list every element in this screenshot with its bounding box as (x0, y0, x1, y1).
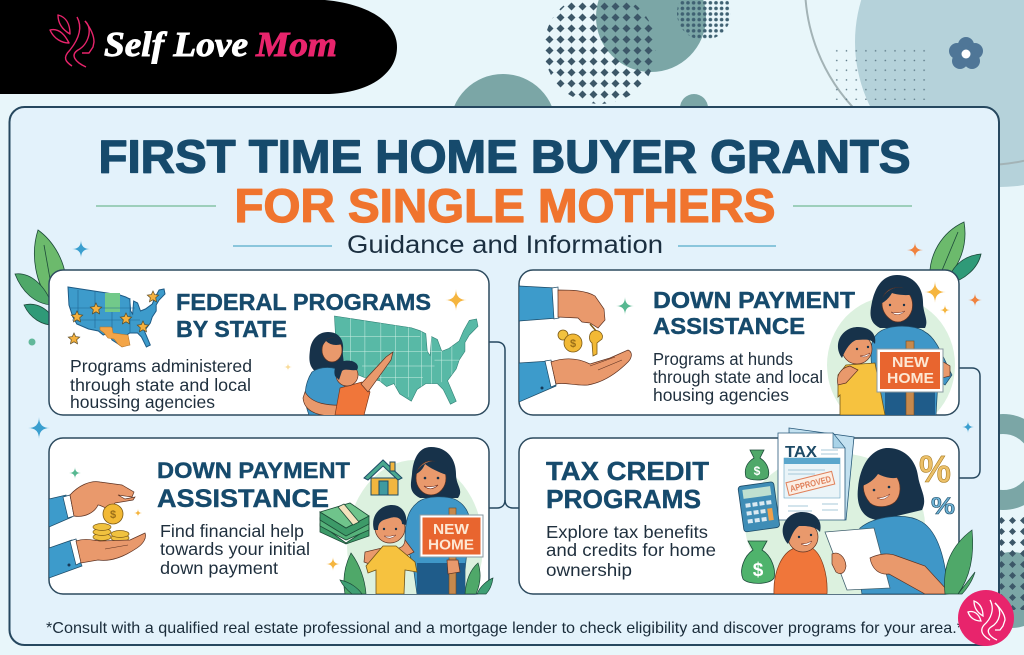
illustration: family with new home sign (344, 447, 480, 594)
card body text (653, 349, 823, 405)
background blob (827, 300, 955, 412)
logo wordmark accent: Mom (255, 25, 337, 64)
icon: calculator (738, 482, 780, 532)
card body text: houssing agencies (70, 392, 215, 412)
card heading line 2: PROGRAMS (546, 484, 701, 514)
background blob (347, 460, 482, 594)
sparkles (924, 281, 950, 315)
icon: money bag small (745, 450, 769, 480)
icon: tax document: APPROVED (789, 474, 832, 494)
card body text: through state and local (653, 367, 823, 387)
sparkle (616, 297, 634, 315)
leaves: right (930, 222, 981, 285)
card body text: Find financial help (160, 521, 304, 541)
card heading: DOWN PAYMENT (157, 458, 350, 483)
illustration: percent symbols: % (919, 449, 951, 491)
illustration: mother and child with document (774, 448, 948, 594)
leaves: left (15, 230, 66, 325)
footnote: *Consult with a qualified real estate professional and a mortgage lender to check eligibility and discover programs for your area.* (46, 620, 963, 637)
logo banner (0, 0, 397, 94)
panel: federal programs by state (49, 270, 489, 416)
logo wordmark: Self Love (104, 25, 248, 64)
card heading: DOWN PAYMENT (653, 287, 855, 313)
sign: new home: HOME (887, 370, 934, 387)
title line 1: FIRST TIME HOME BUYER GRANTS (98, 130, 910, 182)
card body text (70, 356, 252, 412)
icon: cash stack (320, 503, 369, 544)
card heading: TAX CREDIT (546, 456, 709, 486)
icon: hands with coins (49, 482, 146, 578)
illustration: percent symbols (919, 449, 955, 520)
badge: logo circle (958, 590, 1014, 646)
panel: tax credit programs (519, 428, 975, 597)
logo icon: butterfly woman profile (50, 15, 94, 67)
sign: new home: NEW (892, 354, 930, 371)
icon: money bag large: $ (753, 560, 764, 581)
card body text: through state and local (70, 375, 251, 395)
icon: tax document: TAX (785, 444, 817, 461)
sign: new home: HOME (428, 538, 474, 554)
sparkles and dots (28, 240, 982, 439)
sign: new home (420, 515, 483, 557)
card heading line 2: ASSISTANCE (157, 485, 329, 513)
plant overlapping card edge (944, 530, 975, 594)
card heading line 2: ASSISTANCE (653, 313, 805, 339)
panel: down payment assistance (left) (48, 437, 494, 595)
sign: new home (877, 349, 943, 392)
card heading: FEDERAL PROGRAMS (176, 289, 431, 315)
plants overlapping card edge (340, 578, 493, 594)
panel: down payment assistance (right) (519, 270, 959, 433)
card body text: and credits for home (546, 540, 716, 560)
background blob (745, 453, 925, 597)
card body text: towards your initial (160, 539, 310, 559)
main panel (10, 107, 999, 645)
icon: US map with stars (68, 287, 165, 347)
icon: tax document (778, 428, 854, 520)
connectors (489, 342, 980, 508)
illustration: mother and child pointing (303, 332, 393, 416)
illustration: large US map (333, 316, 478, 404)
card body text (160, 521, 310, 578)
icon: hands with coins: $ (110, 509, 116, 521)
card body text: Programs administered (70, 356, 252, 376)
card body text: Programs at hunds (653, 349, 793, 369)
icon: money bag small: $ (754, 464, 761, 478)
icon: house (364, 460, 402, 495)
card body text (546, 522, 716, 580)
illustration: percent symbols: % (931, 493, 955, 520)
sparkle (445, 289, 467, 311)
sparkle (69, 467, 81, 479)
illustration: family with new home sign (838, 275, 952, 415)
icon: money bag large (742, 541, 774, 583)
icon: hands with key and coin (519, 286, 631, 402)
icon: hands with key and coin: $ (570, 338, 576, 350)
card body text: ownership (546, 560, 632, 580)
title line 2: FOR SINGLE MOTHERS (234, 180, 776, 233)
card heading line 2: BY STATE (176, 316, 287, 342)
card body text: down payment (160, 558, 278, 578)
subtitle: Guidance and Information (347, 231, 663, 259)
card body text: Explore tax benefits (546, 522, 708, 542)
icon: flower (949, 37, 983, 69)
card body text: housing agencies (653, 385, 789, 405)
sign: new home: NEW (433, 522, 469, 538)
